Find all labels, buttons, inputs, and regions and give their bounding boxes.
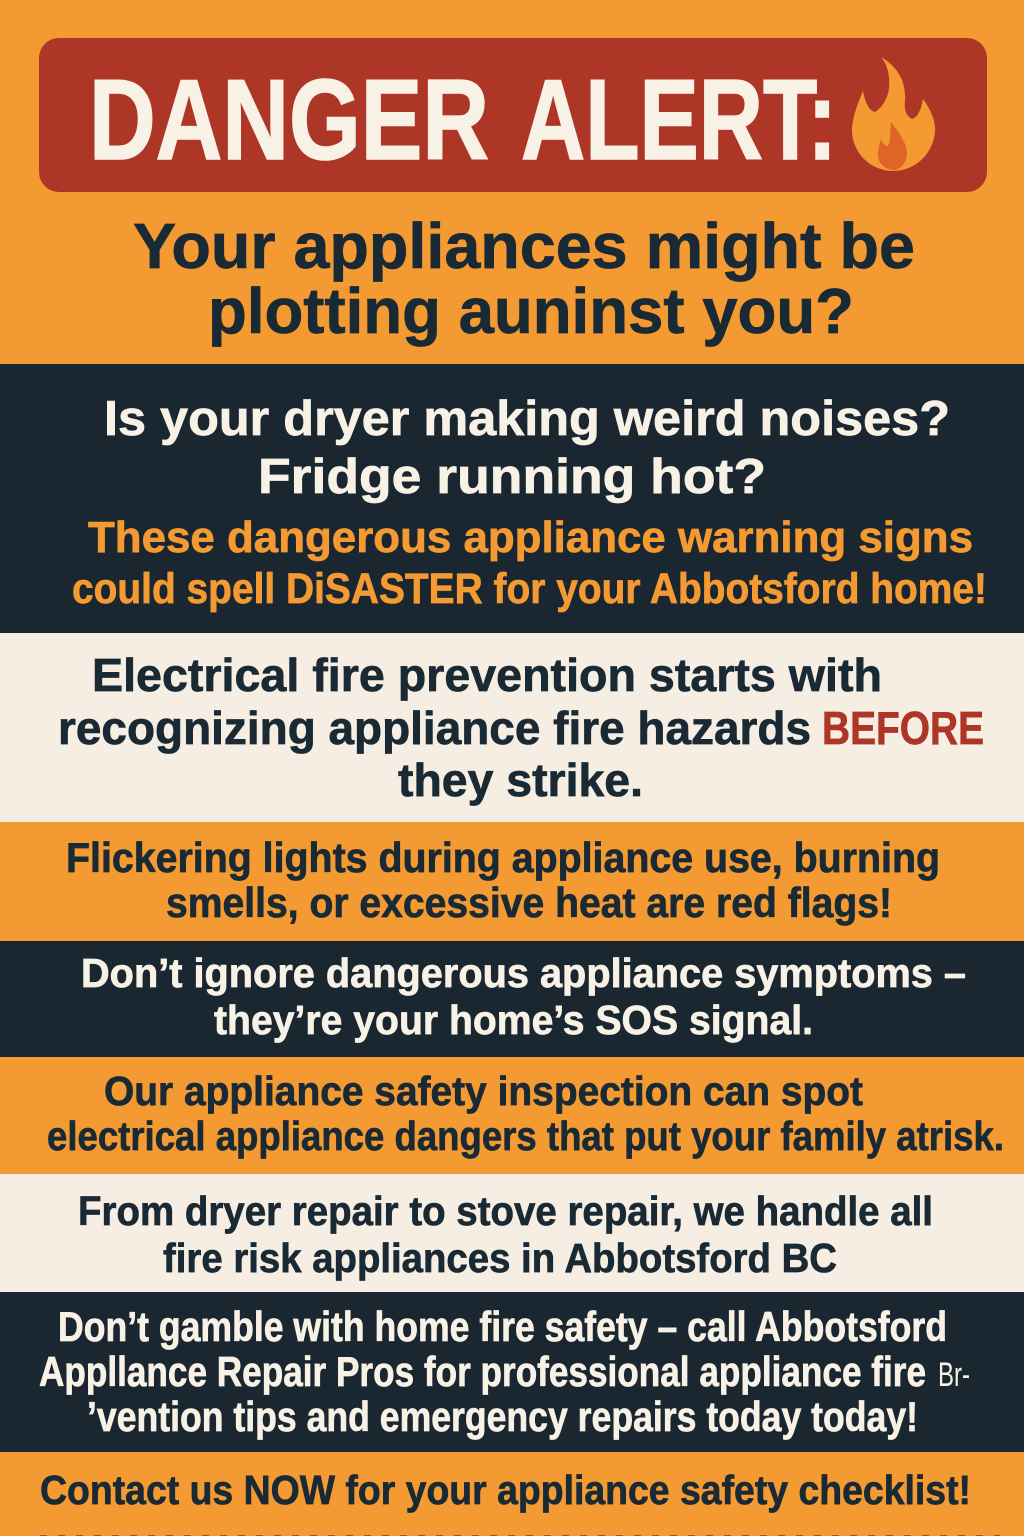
heading: appliances plotting: Your appliances might be: [133, 210, 915, 282]
panel: call to action: [0, 1292, 1024, 1452]
heading: appliances plotting: [133, 210, 915, 347]
panel: warning questions: [0, 364, 1024, 633]
text block: services covered: From dryer repair to stove repair, we handle all: [78, 1188, 933, 1234]
text block: dryer and fridge questions: Fridge running hot?: [258, 450, 766, 504]
text block: warning signs: These dangerous appliance warning signs: [88, 513, 973, 562]
text block: symptoms warning: they’re your home’s SOS signal.: [214, 997, 813, 1043]
title: [89, 57, 837, 184]
panel: SOS signal: [0, 941, 1024, 1057]
panel: contact footer: [0, 1452, 1024, 1536]
text block: inspection offer: [47, 1068, 1004, 1159]
text block: call Abbotsford Appliance Repair Pros: Br-: [938, 1356, 970, 1394]
text block: prevention statement: [58, 649, 984, 806]
panel: electrical fire prevention: [0, 633, 1024, 822]
panel: safety inspection: [0, 1057, 1024, 1174]
text block: warning signs: [72, 513, 987, 613]
panel: repair services: [0, 1174, 1024, 1292]
text block: services covered: [78, 1188, 933, 1281]
panel: danger alert banner: [39, 38, 987, 192]
icon: flame: [852, 57, 935, 171]
heading: appliances plotting: plotting auninst you?: [208, 275, 854, 347]
text block: prevention statement: BEFORE: [822, 702, 984, 754]
title: DANGER: [89, 57, 489, 184]
text block: dryer and fridge questions: Is your dryer making weird noises?: [104, 392, 950, 446]
text block: prevention statement: Electrical fire prevention starts with: [92, 649, 882, 701]
text block: prevention statement: recognizing appliance fire hazards: [58, 702, 811, 754]
text block: symptoms warning: Don’t ignore dangerous appliance symptoms –: [81, 950, 966, 996]
text block: symptoms warning: [81, 950, 966, 1043]
title: ALERT:: [521, 57, 837, 184]
text block: services covered: fire risk appliances in Abbotsford BC: [163, 1235, 837, 1281]
text block: call Abbotsford Appliance Repair Pros: [39, 1303, 970, 1440]
text block: inspection offer: Our appliance safety inspection can spot: [104, 1068, 863, 1114]
text block: red flags list: smells, or excessive heat are red flags!: [166, 879, 892, 926]
text block: prevention statement: they strike.: [398, 754, 643, 806]
text block: red flags list: [66, 834, 940, 926]
text block: dryer and fridge questions: [104, 392, 950, 504]
panel: red flags: [0, 822, 1024, 941]
panel: header background: [0, 0, 1024, 364]
text block: red flags list: Flickering lights during appliance use, burning: [66, 834, 940, 881]
